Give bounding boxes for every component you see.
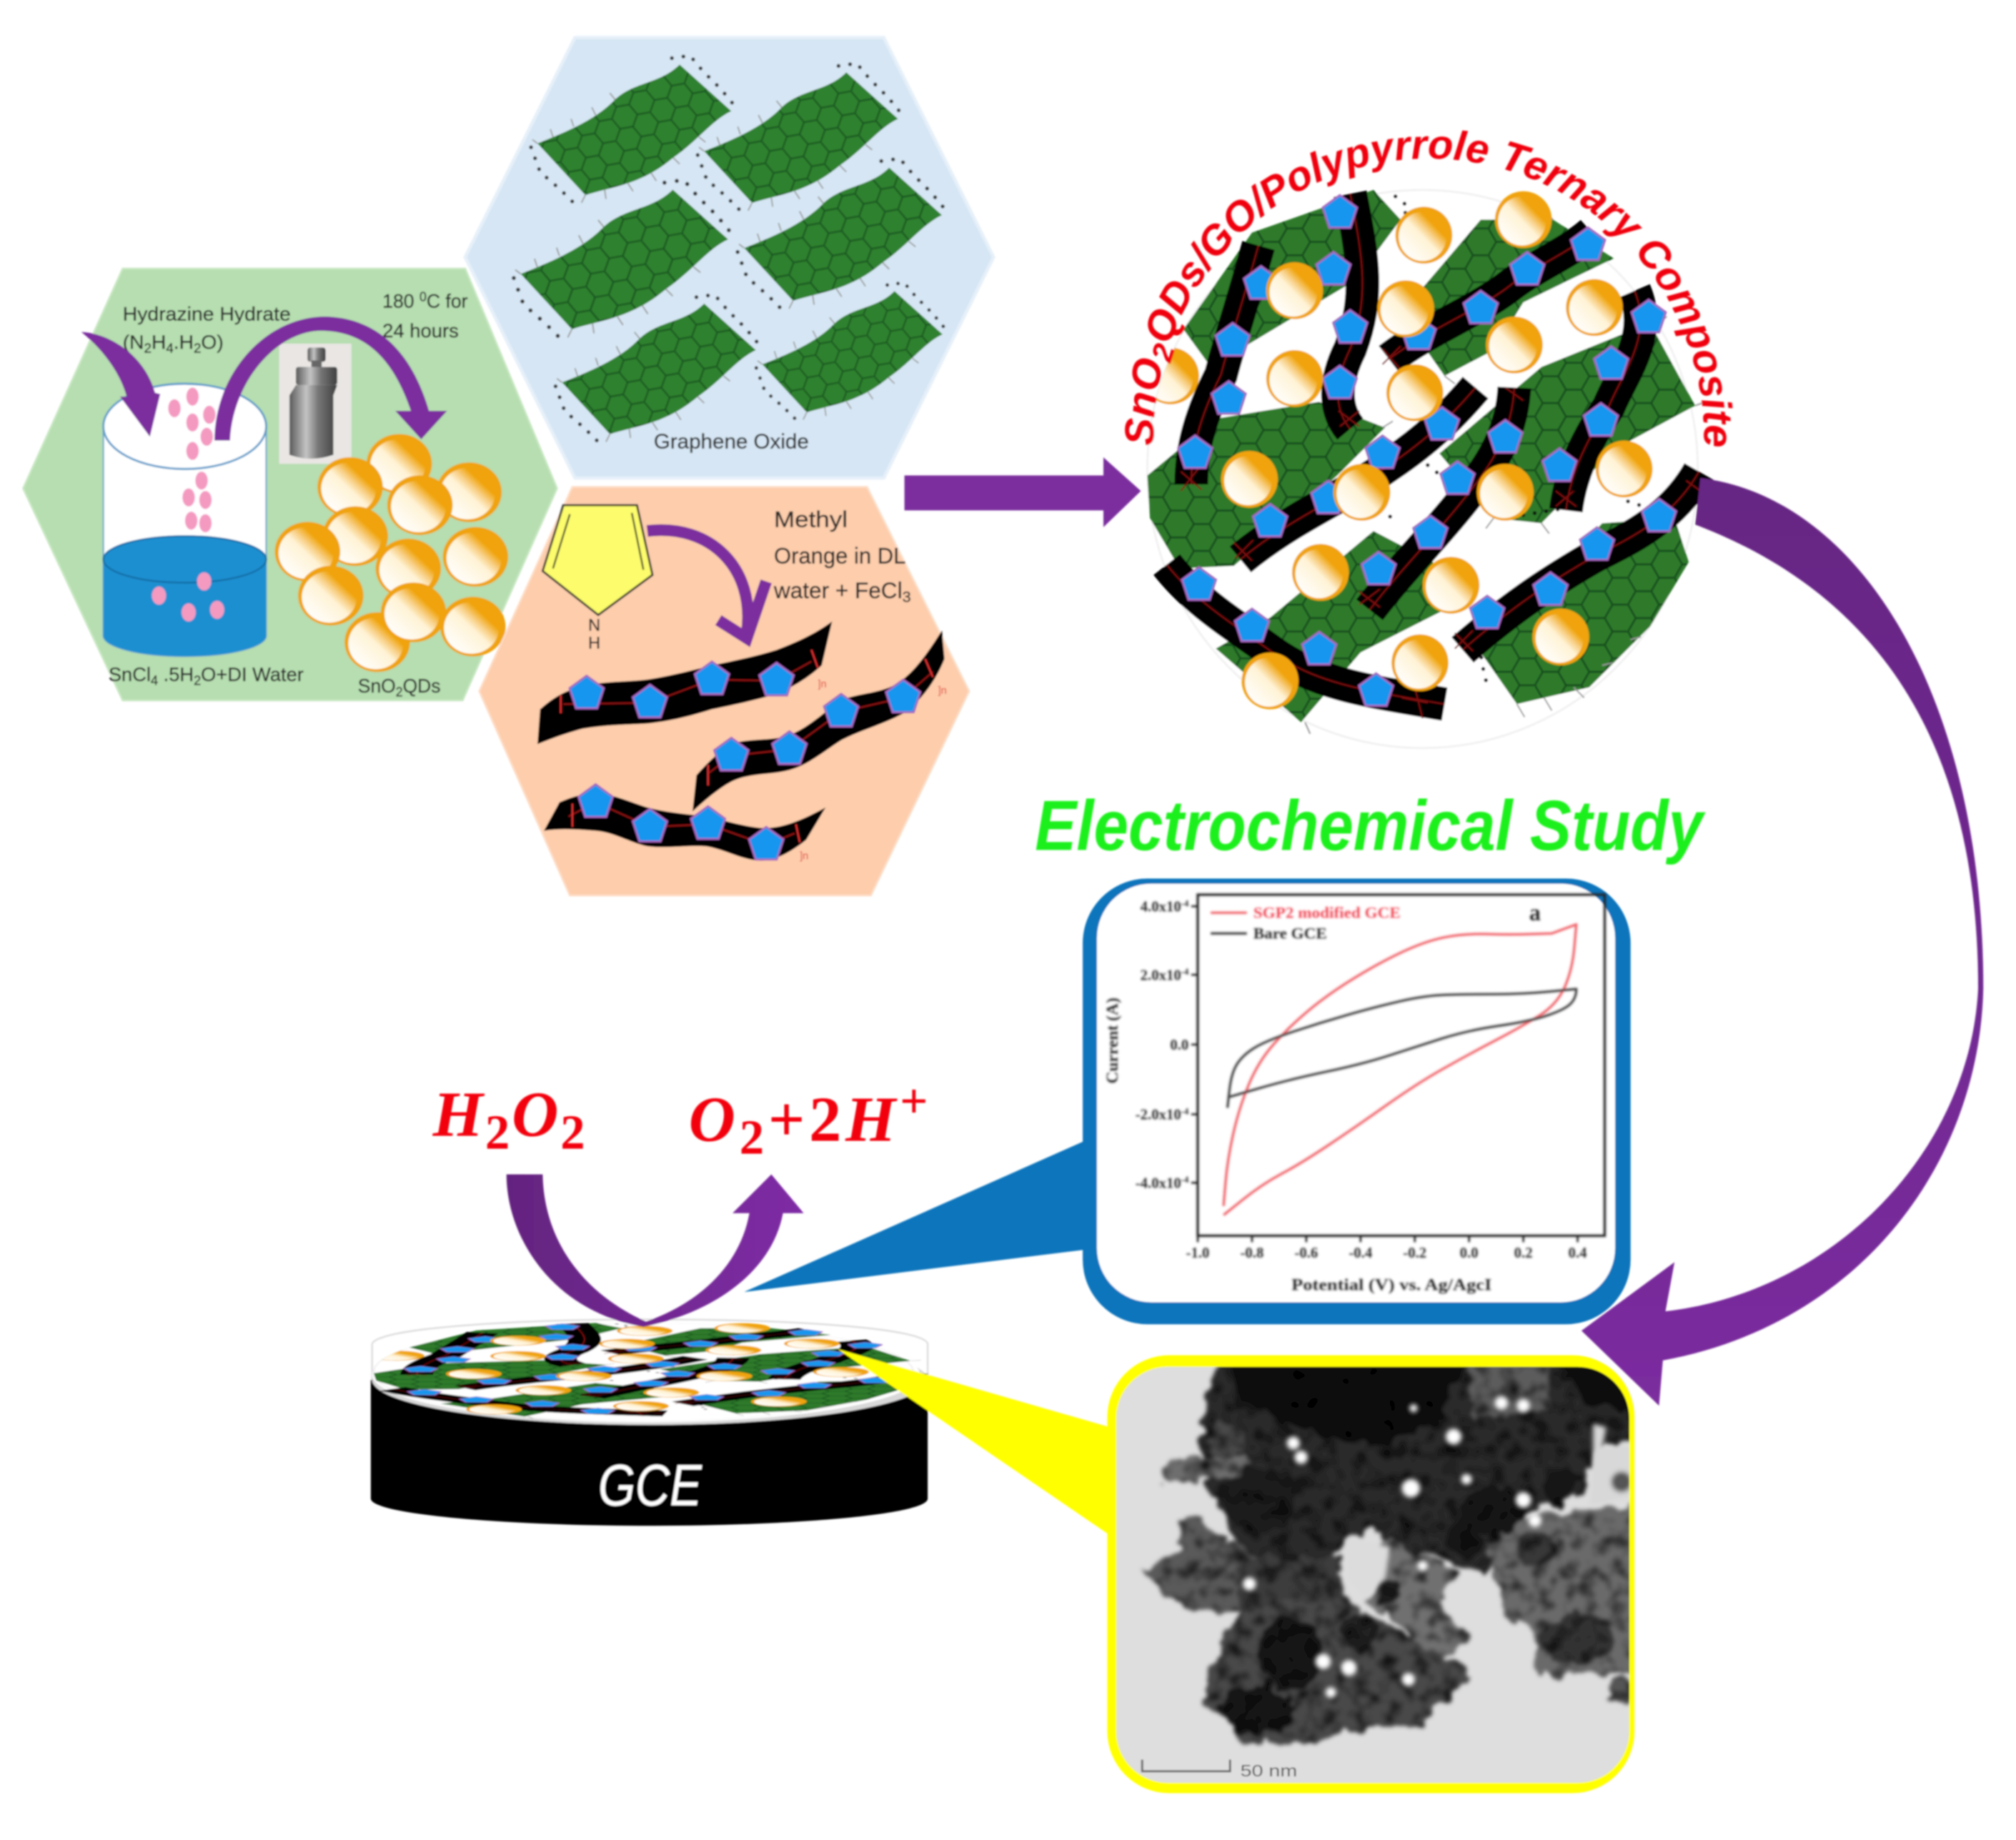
scale bar: 50 nm: [1241, 1761, 1297, 1780]
label: methyl orange: Methyl: [774, 507, 848, 532]
icon: autoclave photo: [279, 344, 352, 464]
label: precursor: SnCl: [109, 663, 151, 685]
chart: cyclic voltammogram: -0.4: [1349, 1245, 1372, 1261]
label: precursor: O+DI Water: [201, 663, 304, 685]
chart: cyclic voltammogram: 0.4: [1569, 1245, 1587, 1261]
label: H2O2: H: [433, 1078, 485, 1150]
title: composite name on arc: 2: [1152, 342, 1175, 364]
label: hydrazine formula: 4: [166, 342, 174, 356]
label: SnO2QDs: 2: [396, 685, 403, 700]
chart: cyclic voltammogram: 2.0x10: [1141, 967, 1181, 983]
label: hydrazine formula: (N: [123, 331, 143, 353]
chart: cyclic voltammogram: -0.6: [1294, 1245, 1318, 1261]
label: water FeCl3: water + FeCl: [774, 577, 903, 603]
label: orange in DI: Orange in DL: [774, 542, 905, 568]
label: SnO2QDs: QDs: [403, 675, 441, 697]
panel: TEM micrograph: [1107, 1350, 1647, 1794]
title: composite name on arc: QDs/GO/Polypyrrole Ternary Composite: [1146, 129, 1734, 447]
label: GCE: GCE: [598, 1453, 702, 1518]
arrow: big curved composite to electrode: [1581, 478, 1983, 1406]
panel: SnO2 quantum dot synthesis hexagon: [24, 269, 557, 700]
chart: cyclic voltammogram: Bare GCE: [1253, 925, 1327, 943]
polypyrrole ribbons: ]n: [938, 685, 947, 697]
chart: cyclic voltammogram: -0.8: [1240, 1245, 1263, 1261]
label: H2O2: 2: [560, 1105, 587, 1159]
chart: cyclic voltammogram: 0.2: [1514, 1245, 1533, 1261]
label: hydrazine formula: .H: [174, 331, 194, 353]
label: temperature: 180: [382, 289, 414, 312]
label: hydrazine hydrate: Hydrazine Hydrate: [123, 302, 291, 324]
label: O2 + 2H+: H: [845, 1083, 900, 1155]
chart: cyclic voltammogram: 4.0x10: [1141, 899, 1181, 915]
chart: cyclic voltammogram: -2.0x10: [1136, 1107, 1181, 1123]
chart: cyclic voltammogram: -4: [1181, 898, 1189, 908]
chart: cyclic voltammogram: a: [1529, 900, 1541, 926]
composite coating on electrode: [369, 1323, 920, 1421]
chart: cyclic voltammogram: -0.2: [1403, 1245, 1426, 1261]
label: hydrazine formula: O): [201, 331, 224, 353]
chart: cyclic voltammogram: -4: [1181, 967, 1189, 977]
chart: cyclic voltammogram: -4: [1181, 1106, 1189, 1116]
label: O2 + 2H+: +: [900, 1074, 932, 1128]
arrow: H2O2 oxidation U-turn: [507, 1174, 804, 1327]
arrow: polymerisation: [647, 530, 766, 638]
chart: cyclic voltammogram: 0.0: [1460, 1245, 1479, 1261]
chart: cyclic voltammogram: -4.0x10: [1136, 1175, 1181, 1191]
chart: cyclic voltammogram: -4: [1181, 1175, 1189, 1185]
arrow: hydrazine addition: [81, 332, 160, 437]
callout wedge: blue: [744, 1140, 1088, 1292]
panel: graphene oxide hexagon: [465, 37, 993, 478]
chart: cyclic voltammogram: -1.0: [1186, 1245, 1209, 1261]
label: hydrazine formula: 2: [144, 342, 152, 356]
electrode: GCE disc: [369, 1319, 928, 1526]
chart: cyclic voltammogram: Potential (V) vs. Ag/AgcI: [1291, 1275, 1491, 1294]
label: precursor: 2: [194, 673, 201, 687]
composite illustration: [1142, 190, 1706, 748]
label: hydrazine formula: 2: [194, 342, 201, 356]
label: graphene oxide: Graphene Oxide: [654, 430, 809, 453]
label: SnO2QDs: SnO: [358, 675, 397, 697]
icon: pyrrole ring: H: [588, 634, 600, 652]
panel: cyclic voltammetry plot: [1083, 878, 1631, 1324]
label: O2 + 2H+: +2: [768, 1083, 845, 1155]
label: O2 + 2H+: O: [689, 1083, 740, 1155]
label: hydrazine formula: H: [152, 331, 166, 353]
icon: beaker: [104, 384, 266, 656]
polypyrrole ribbons: [537, 622, 947, 862]
icon: pyrrole ring: [542, 505, 652, 652]
arrow: hydrothermal transfer: [214, 317, 447, 441]
title: composite name on arc: SnO: [1123, 357, 1162, 446]
chart: cyclic voltammogram: SGP2 modified GCE: [1253, 905, 1401, 922]
scale bar: [1142, 1760, 1297, 1780]
SnO2 quantum dots cluster: [275, 434, 508, 672]
label: O2 + 2H+: 2: [740, 1110, 768, 1165]
label: precursor: 4: [151, 673, 158, 687]
panel: polypyrrole hexagon: [480, 487, 969, 895]
label: temperature: C for: [427, 289, 467, 312]
label: H2O2: O: [512, 1078, 560, 1150]
polypyrrole ribbons: ]n: [800, 850, 808, 862]
heading: Electrochemical Study: Electrochemical Study: [1035, 787, 1706, 866]
graphene sheets: [514, 56, 950, 442]
label: duration: 24 hours: [382, 319, 459, 342]
polypyrrole ribbons: ]n: [818, 679, 827, 690]
icon: pyrrole ring: N: [588, 615, 600, 634]
chart: cyclic voltammogram: 0.0: [1170, 1037, 1188, 1053]
label: temperature: 0: [419, 289, 427, 304]
pink droplets: [152, 387, 224, 622]
label: precursor: .5H: [158, 663, 194, 685]
label: water FeCl3: 3: [903, 588, 911, 606]
chart: cyclic voltammogram: Current (A): [1103, 998, 1122, 1084]
TEM particles: [1141, 1350, 1647, 1743]
chart: cyclic voltammogram: [1103, 895, 1605, 1294]
callout wedge: yellow: [838, 1349, 1111, 1536]
arrow: precursors to composite: [905, 457, 1141, 527]
label: H2O2: 2: [485, 1105, 512, 1159]
